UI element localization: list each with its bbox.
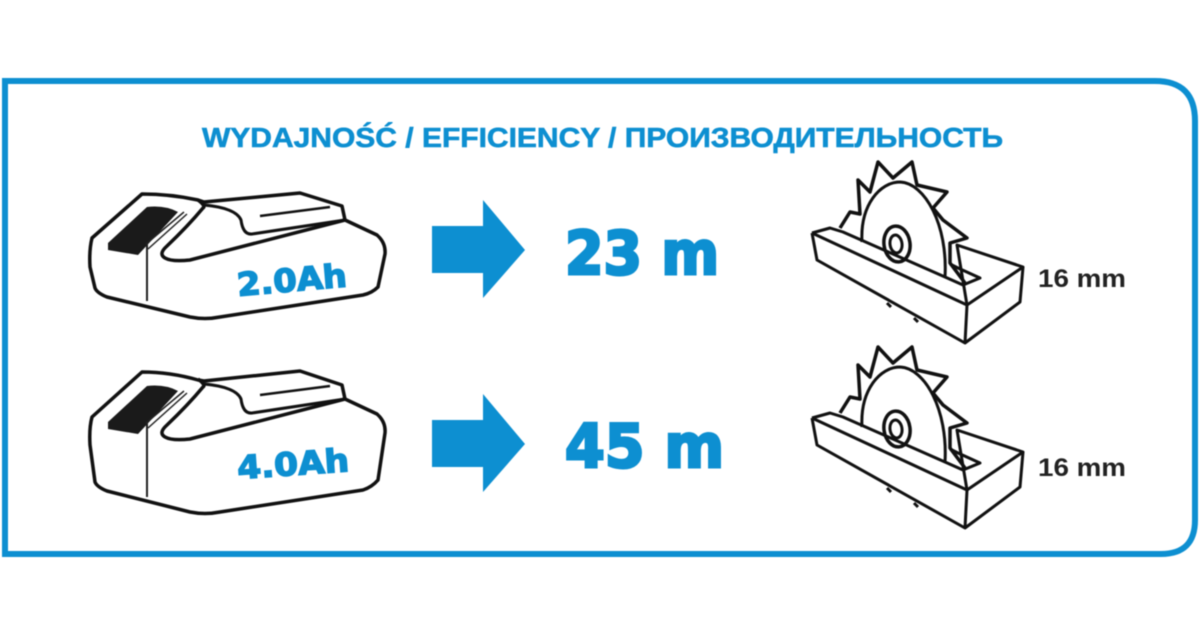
label: 16 mm, second: 16 mm — [1038, 454, 1126, 482]
battery grip — [108, 386, 178, 434]
battery grip — [108, 207, 178, 255]
battery label: 2.0Ah — [235, 257, 348, 304]
label: 16 mm: 16 mm — [1038, 265, 1126, 293]
icon: saw and 16 mm board — [812, 162, 1023, 343]
arrow: 4.0Ah — [432, 394, 525, 492]
panel: efficiency frame — [5, 81, 1195, 554]
value: 45 m: 45 m — [565, 412, 724, 482]
icon: battery 2.0Ah — [90, 193, 385, 318]
title: WYDAJNOŚĆ / EFFICIENCY / ПРОИЗВОДИТЕЛЬНОСТЬ — [202, 122, 1003, 153]
arrow: 2.0Ah — [432, 200, 525, 298]
icon: battery 4.0Ah — [90, 371, 385, 514]
battery label: 4.0Ah — [236, 441, 350, 487]
icon: saw and 16 mm board, second — [812, 347, 1023, 528]
value: 23 m: 23 m — [565, 219, 719, 289]
